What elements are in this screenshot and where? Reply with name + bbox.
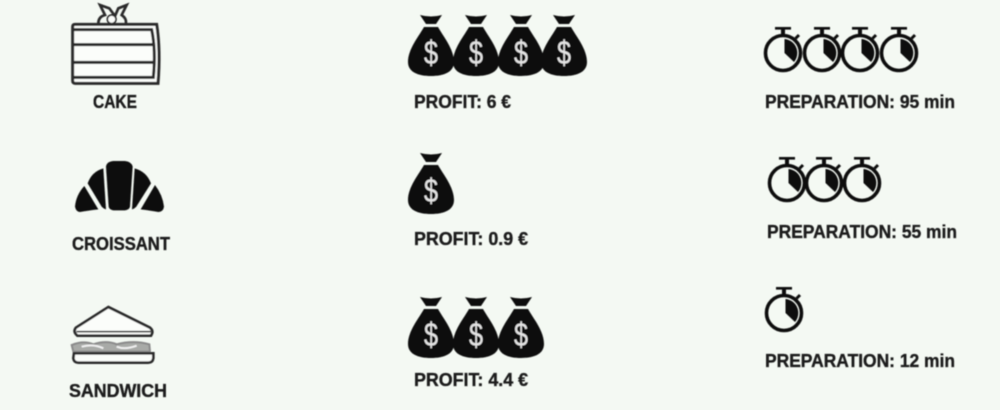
icon row: timers cake xyxy=(766,27,916,70)
icon: croissant xyxy=(75,161,164,212)
icon: timer sandwich xyxy=(766,287,802,330)
icon row: money bags cake: $ xyxy=(514,34,528,71)
icon row: money bags sandwich: $ xyxy=(469,316,483,353)
icon row: money bags cake: $ xyxy=(469,34,483,71)
label: preparation sandwich: PREPARATION: 12 min xyxy=(765,351,955,371)
icon: sandwich xyxy=(72,307,153,363)
label: preparation cake: PREPARATION: 95 min xyxy=(765,92,955,112)
label: preparation croissant: PREPARATION: 55 min xyxy=(767,222,957,242)
icon row: money bags cake xyxy=(408,15,587,76)
label: profit sandwich: PROFIT: 4.4 € xyxy=(414,370,528,390)
icon row: money bags sandwich xyxy=(408,297,544,358)
label: croissant: CROISSANT xyxy=(72,234,170,254)
label: sandwich: SANDWICH xyxy=(69,381,167,401)
icon row: money bags sandwich: $ xyxy=(514,316,528,353)
icon row: money bag croissant: $ xyxy=(424,172,438,209)
icon row: money bag croissant xyxy=(408,153,454,214)
icon row: money bags sandwich: $ xyxy=(424,316,438,353)
icon row: money bags cake: $ xyxy=(424,34,438,71)
icon: cake xyxy=(73,5,159,83)
icon row: timers croissant xyxy=(770,157,880,200)
icon row: money bags cake: $ xyxy=(557,34,571,71)
label: profit croissant: PROFIT: 0.9 € xyxy=(414,229,528,249)
label: cake: CAKE xyxy=(93,92,137,112)
label: profit cake: PROFIT: 6 € xyxy=(414,92,511,112)
